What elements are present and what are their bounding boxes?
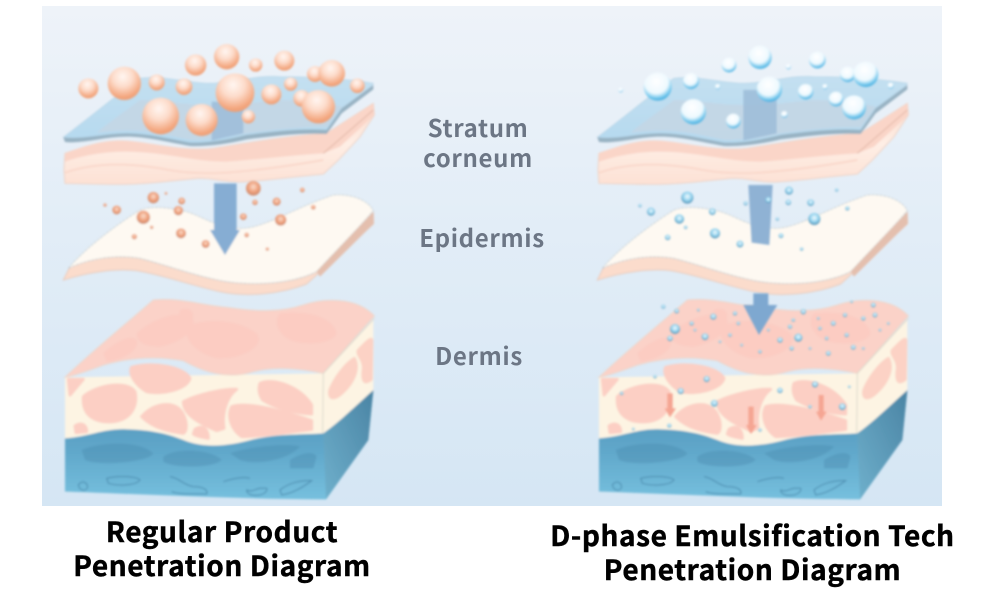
title: d-phase emulsification tech: Penetration Diagram: [604, 549, 901, 589]
blue spheres: [618, 46, 894, 128]
stratum corneum layers: [63, 76, 374, 184]
title: regular product: Penetration Diagram: [73, 545, 371, 585]
arrow: into dermis: [743, 293, 777, 335]
label: stratum corneum: corneum: [423, 139, 533, 174]
panel: d-phase emulsification diagram: [597, 46, 908, 499]
label: dermis: Dermis: [435, 337, 523, 372]
arrow: shaft on the sheet: [743, 90, 777, 141]
arrow: shaft over epidermis: [748, 185, 773, 245]
label: stratum corneum: Stratum: [428, 109, 528, 144]
orange spheres: [78, 44, 365, 136]
red arrows: [665, 393, 827, 434]
dermis layer: [65, 299, 374, 499]
panel: regular product diagram: [63, 44, 374, 499]
arrow head: [210, 183, 240, 255]
blue particles: [638, 187, 849, 251]
title: d-phase emulsification tech: D-phase Emulsification Tech: [550, 515, 955, 555]
arrow: shaft on the sheet: [212, 102, 243, 141]
dermis particles: [620, 300, 890, 432]
stratum corneum layers: [597, 76, 908, 184]
orange particles: [103, 181, 316, 251]
epidermis layer: [63, 195, 374, 294]
title: regular product: Regular Product: [106, 511, 338, 551]
background panel: [42, 6, 942, 506]
label: epidermis: Epidermis: [419, 219, 545, 254]
dermis layer with arrows and particles: [599, 299, 908, 499]
epidermis layer: [597, 195, 908, 294]
